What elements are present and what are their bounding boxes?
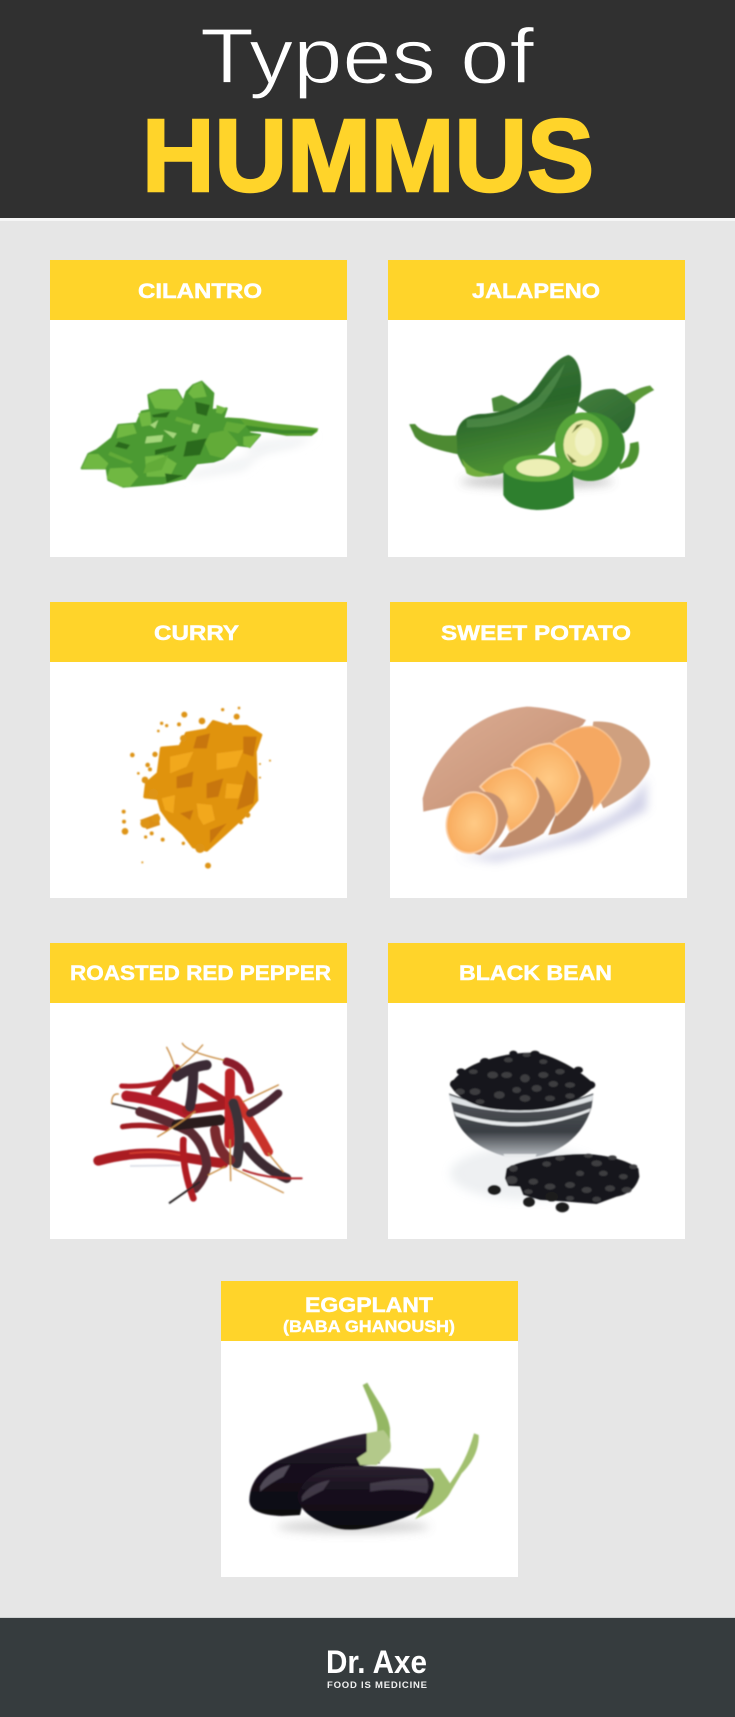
icon: sweet potato slices <box>423 707 650 862</box>
panel: sweet potato <box>390 602 687 898</box>
label: baba ghanoush: (BABA GHANOUSH) <box>283 1317 455 1336</box>
panel: jalapeno <box>388 260 685 557</box>
panel: curry <box>50 602 347 898</box>
icon: dried red chillies <box>98 1043 302 1203</box>
panel: roasted red pepper <box>50 943 347 1239</box>
label: eggplant: EGGPLANT <box>305 1294 433 1317</box>
label: black bean: BLACK BEAN <box>459 962 612 985</box>
icon: curry powder <box>122 707 271 869</box>
header banner <box>0 0 735 221</box>
label: jalapeno: JALAPENO <box>472 280 600 303</box>
label: cilantro: CILANTRO <box>138 280 262 303</box>
panel: cilantro <box>50 260 347 557</box>
icon: cilantro bunch <box>82 382 318 487</box>
icon: two eggplants <box>249 1383 479 1533</box>
title line: HUMMUS: HUMMUS <box>142 98 594 213</box>
panel: black bean <box>388 943 685 1239</box>
footer bar <box>0 1617 735 1717</box>
label: roasted red pepper: ROASTED RED PEPPER <box>70 962 331 985</box>
icon: jalapeno peppers <box>409 355 654 510</box>
tagline: food is medicine: FOOD IS MEDICINE <box>327 1680 427 1691</box>
icon: bowl of black beans <box>449 1051 639 1212</box>
title line: Types of: Types of <box>200 12 534 100</box>
panel: eggplant <box>221 1281 518 1577</box>
logo: Dr. Axe: Dr. Axe <box>326 1644 427 1680</box>
label: curry: CURRY <box>154 622 239 645</box>
label: sweet potato: SWEET POTATO <box>441 622 631 645</box>
